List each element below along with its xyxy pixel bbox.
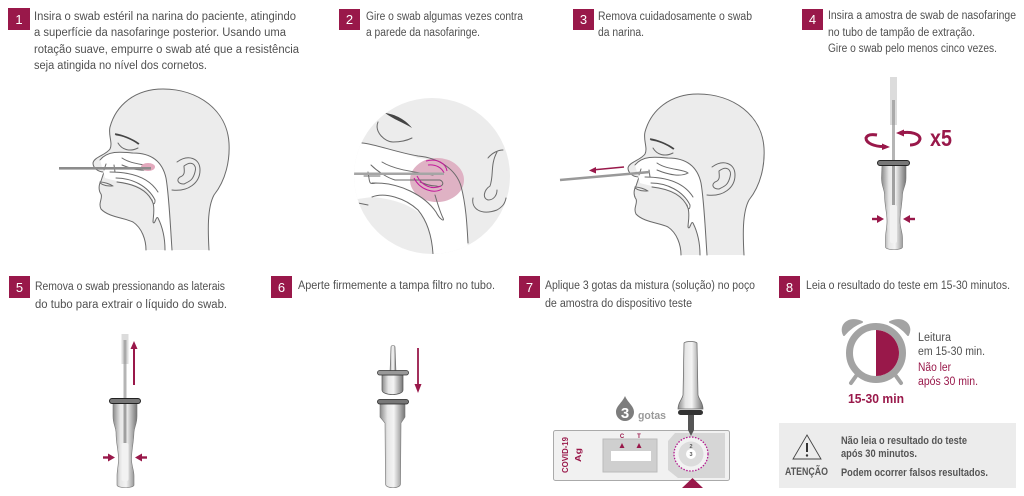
step number 7	[519, 276, 540, 298]
panel: step 1	[8, 8, 300, 250]
step number 8	[779, 276, 800, 298]
panel: step 6	[271, 276, 495, 488]
illustration: test cassette: 3	[689, 452, 693, 458]
step number 3	[573, 9, 594, 30]
step 8 instructions: Leia o resultado do teste em 15-30 minutos.	[806, 280, 1010, 292]
step 5 instructions: do tubo para extrair o líquido do swab.	[35, 299, 227, 311]
icon: 3 drops: gotas	[638, 410, 666, 422]
panel: step 2	[339, 9, 524, 254]
step number 5	[9, 276, 30, 298]
illustration: squeezing tube and removing swab	[110, 334, 140, 488]
panel: step 7	[519, 276, 755, 488]
step 2 instructions	[366, 11, 524, 39]
illustration: test cassette: Ag	[573, 448, 583, 462]
arrows: squeeze tube	[872, 215, 915, 223]
callout: warning	[779, 423, 1016, 488]
arrow: cap down	[414, 348, 422, 393]
step 4 instructions	[828, 10, 1016, 55]
step 1 instructions: rotação suave, empurre o swab até que a resistência	[34, 44, 300, 56]
step 1 instructions: Insira o swab estéril na narina do paciente, atingindo	[34, 11, 296, 23]
step number 4	[802, 9, 823, 30]
text: reading time: Não ler	[918, 362, 951, 374]
icon: warning triangle	[793, 435, 821, 459]
step number 2	[339, 9, 360, 30]
warning text: Não leia o resultado do teste	[841, 435, 967, 447]
text: reading time	[918, 332, 985, 388]
step 3 instructions: da narina.	[598, 27, 644, 39]
illustration: head with swab being removed	[560, 94, 764, 255]
step 5 instructions	[35, 281, 227, 311]
step 1 instructions	[34, 11, 300, 72]
step 7 instructions: de amostra do dispositivo teste	[545, 298, 692, 310]
illustration: test cassette: COVID-19	[560, 437, 570, 473]
step 7 instructions	[545, 280, 755, 310]
icon: 3 drops: 3	[621, 405, 629, 422]
step number 8: 8	[786, 280, 793, 295]
illustration: nasopharynx close-up circle	[350, 98, 510, 254]
step 3 instructions	[598, 11, 752, 39]
warning text: Podem ocorrer falsos resultados.	[841, 467, 988, 479]
arrow: swab removal	[589, 167, 624, 174]
arrow: pull swab up	[130, 341, 138, 385]
arrows: rotation	[866, 130, 920, 150]
step 2 instructions: a parede da nasofaringe.	[366, 27, 480, 39]
step 1 instructions: seja atingida no nível dos cornetos.	[34, 60, 207, 72]
text: reading time: Leitura	[918, 332, 952, 344]
step number 1	[8, 8, 30, 30]
text: reading time: após 30 min.	[918, 376, 978, 388]
label: attention: ATENÇÃO	[785, 465, 828, 478]
step number 7: 7	[526, 280, 533, 295]
step 4 instructions: Gire o swab pelo menos cinco vezes.	[828, 43, 997, 55]
icon: alarm clock	[843, 320, 909, 383]
panel: step 5	[9, 276, 227, 488]
step number 5: 5	[16, 280, 23, 295]
arrows: squeeze tube	[103, 454, 147, 462]
warning text	[841, 435, 988, 479]
panel: step 4	[802, 9, 1016, 250]
step 2 instructions: Gire o swab algumas vezes contra	[366, 11, 524, 23]
step 6 instructions: Aperte firmemente a tampa filtro no tubo.	[298, 280, 495, 292]
panel: step 8	[779, 276, 1016, 488]
illustration: test cassette: T	[637, 434, 641, 440]
illustration: test cassette	[554, 430, 730, 480]
step number 2: 2	[346, 12, 353, 27]
panel: step 3	[560, 9, 764, 255]
step number 6	[271, 276, 292, 298]
illustration: swab in extraction tube	[878, 77, 910, 250]
warning text: após 30 minutos.	[841, 448, 917, 460]
step 3 instructions: Remova cuidadosamente o swab	[598, 11, 752, 23]
text: reading time: em 15-30 min.	[918, 346, 985, 358]
illustration: test cassette: C	[620, 434, 625, 440]
step 5 instructions: Remova o swab pressionando as laterais	[35, 281, 225, 293]
step number 1: 1	[15, 12, 23, 27]
step number 6: 6	[278, 280, 285, 295]
label: x5: x5	[930, 125, 952, 151]
step number 4: 4	[809, 12, 816, 27]
marker: sample well triangle	[682, 478, 703, 488]
illustration: test cassette: 2	[689, 444, 693, 450]
icon: 3 drops	[616, 396, 666, 422]
illustration: head with swab inserted	[59, 89, 229, 250]
step 7 instructions: Aplique 3 gotas da mistura (solução) no poço	[545, 280, 755, 292]
illustration: dropper	[678, 342, 703, 436]
label: 15-30 min: 15-30 min	[848, 392, 904, 406]
step 4 instructions: no tubo de tampão de extração.	[828, 27, 975, 39]
illustration: filter cap and tube	[378, 346, 408, 488]
step 1 instructions: a superfície da nasofaringe posterior. Usando uma	[34, 27, 287, 39]
step number 3: 3	[580, 12, 587, 27]
